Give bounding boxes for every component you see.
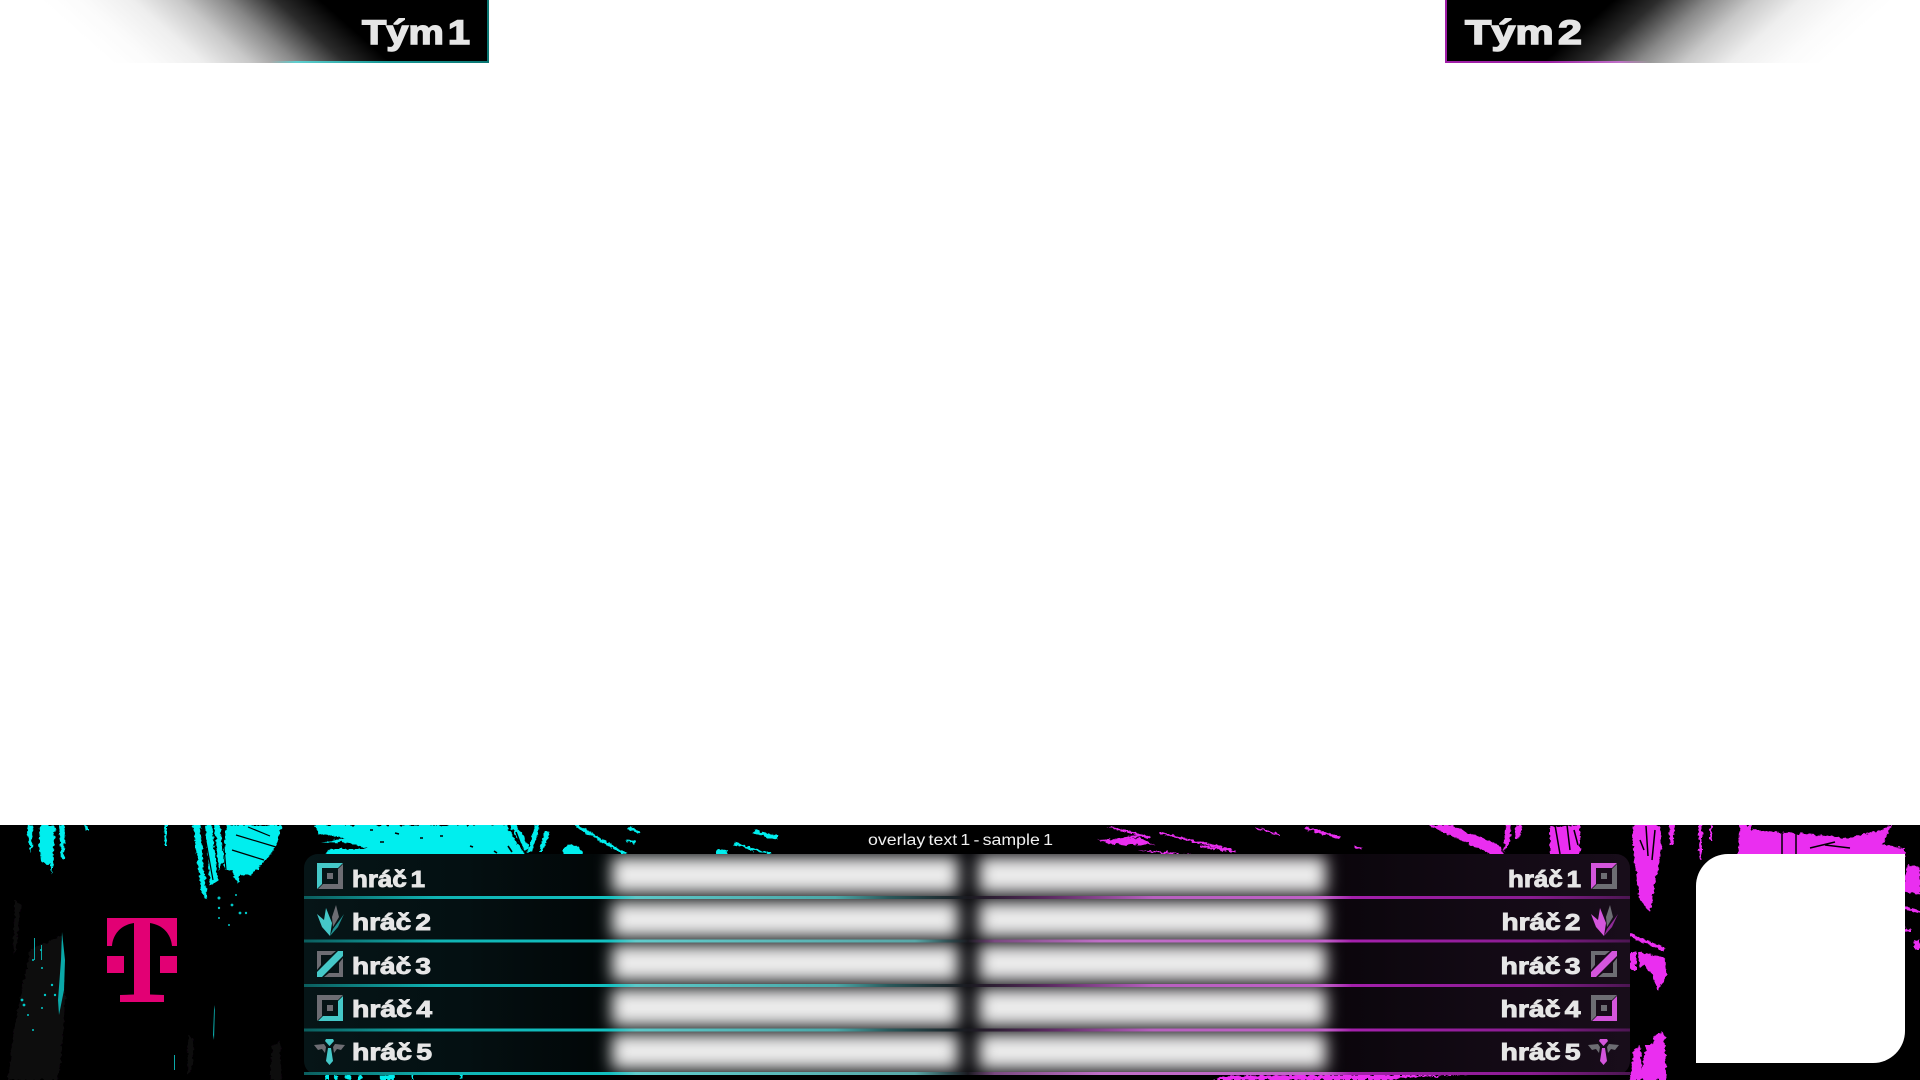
player name: team 2 row 3: hráč 3 xyxy=(1500,953,1580,979)
icon: team 2 row 1 square xyxy=(1591,863,1617,889)
roster panel xyxy=(304,854,1630,1075)
dim plum brush strokes xyxy=(8,900,282,1080)
player name: team 2 row 5: hráč 5 xyxy=(1500,1039,1581,1065)
blurred stat bars: row 2 xyxy=(612,902,1326,937)
row divider lines team 1 xyxy=(304,896,968,1075)
icon: team 2 row 3 diagonal xyxy=(1591,951,1617,977)
icon: team 2 row 4 square xyxy=(1591,995,1617,1021)
team 1 header xyxy=(40,0,489,63)
webcam cutout xyxy=(1696,854,1905,1063)
player name: team 1 row 3: hráč 3 xyxy=(352,953,431,979)
icon: team 1 row 2 leaves xyxy=(317,905,344,936)
T-Mobile logo xyxy=(107,918,177,1002)
dim teal brush streaks xyxy=(34,932,215,1070)
cyan speckles xyxy=(21,894,247,1031)
black scratches over cyan xyxy=(203,825,522,880)
magenta brush strokes xyxy=(1097,825,1920,1080)
player name: team 1 row 2: hráč 2 xyxy=(352,909,431,935)
player name: team 2 row 4: hráč 4 xyxy=(1500,996,1581,1022)
player name: team 1 row 1: hráč 1 xyxy=(352,866,425,892)
cyan brush strokes xyxy=(27,825,778,1080)
icon: team 1 row 3 diagonal xyxy=(317,951,343,977)
icon: team 2 row 5 winged figure xyxy=(1588,1039,1619,1065)
icon: team 1 row 4 square xyxy=(317,995,343,1021)
blurred stat bars: row 5 xyxy=(612,1034,1326,1069)
blurred stat bars: row 3 xyxy=(612,945,1326,981)
team 1 name: Tým 1 xyxy=(362,14,470,52)
blurred stat bars: row 1 xyxy=(612,857,1326,893)
bottom black band with brush strokes xyxy=(0,825,1920,1080)
icon: team 2 row 2 leaves xyxy=(1591,905,1618,936)
icon: team 1 row 5 winged figure xyxy=(314,1039,345,1065)
team 2 header xyxy=(1445,0,1894,63)
team 2 name: Tým 2 xyxy=(1465,14,1582,52)
player name: team 1 row 5: hráč 5 xyxy=(352,1039,432,1065)
player name: team 2 row 1: hráč 1 xyxy=(1508,866,1581,892)
row divider lines team 2 xyxy=(968,896,1630,1075)
black scratches over magenta xyxy=(1554,826,1850,860)
blurred stat bars: row 4 xyxy=(612,989,1326,1026)
overlay caption: overlay text 1 - sample 1 xyxy=(868,832,1053,849)
player name: team 1 row 4: hráč 4 xyxy=(352,996,432,1022)
player name: team 2 row 2: hráč 2 xyxy=(1502,909,1580,935)
icon: team 1 row 1 square xyxy=(317,863,343,889)
